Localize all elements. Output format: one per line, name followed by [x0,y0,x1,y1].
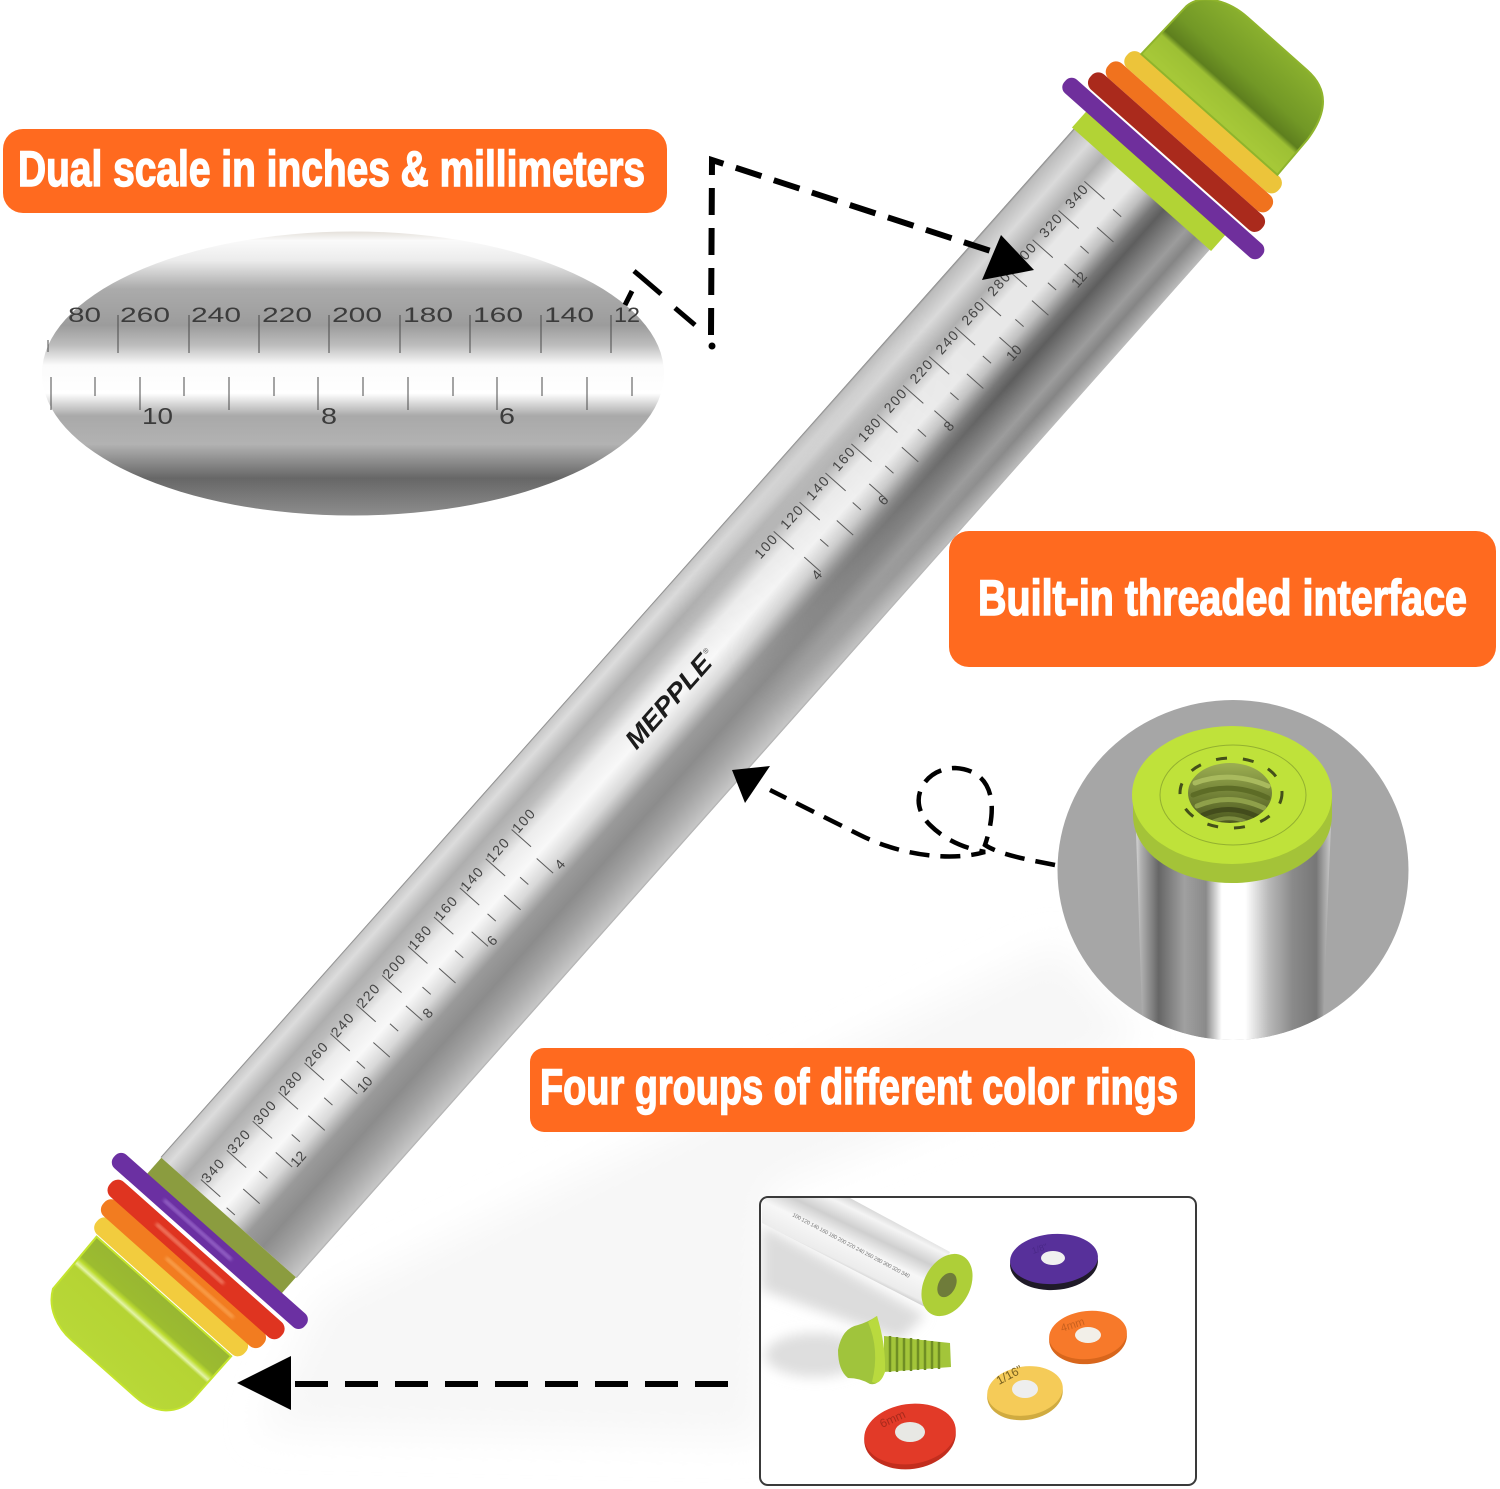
top colour rings [1059,28,1309,263]
ruler magnifier ellipse: 240 [191,304,241,327]
ruler magnifier ellipse: 140 [544,304,594,327]
arrow: photo to pin end [237,1356,728,1410]
steel rod [161,128,1210,1278]
bottom ruler scale: 200 [379,951,409,982]
bottom ruler scale: 180 [405,921,435,953]
brand logo: ® [701,646,711,656]
bottom ruler scale: 240 [327,1009,358,1040]
ruler magnifier ellipse: 12 [614,304,640,327]
rod end with thread hole [921,1254,973,1316]
top collar [1072,110,1227,251]
ruler magnifier ellipse: 80 [68,304,101,327]
top ruler scale: 260 [958,297,988,328]
top ruler scale: 120 [777,501,807,532]
top ruler scale: 320 [1036,210,1066,241]
top ruler scale: 200 [880,385,911,416]
parts photo panel [760,1197,1196,1485]
top ruler scale: 160 [829,443,859,474]
top ruler scale: 220 [906,355,937,387]
purple ring: 1/8" [1031,1242,1049,1256]
bottom ruler scale: 340 [198,1155,228,1186]
dashed hole markings [1180,758,1282,828]
bottom handle [34,1237,231,1426]
ruler magnifier ellipse: 220 [262,304,312,327]
top ruler scale: 100 [751,530,781,562]
threaded hole [1188,763,1272,823]
darker steel shading toward top end [734,129,1210,652]
bottom ruler scale: 320 [224,1125,254,1157]
red ring: 6mm [878,1407,908,1431]
top ruler scale [751,179,1136,599]
bottom ruler scale: 140 [457,863,487,894]
bottom ruler scale: 10 [353,1073,376,1095]
callout: colour rings [530,1048,1195,1132]
threaded end magnifier circle [1058,700,1408,1046]
red ring [864,1404,956,1470]
bottom colour rings [68,1150,311,1378]
bottom ruler scale: 8 [419,1005,436,1021]
brand logo: MEPPLE [619,647,719,755]
top ruler scale: 240 [932,326,962,357]
callout: dual scale: Dual scale in inches & millimeters [18,141,645,197]
callout: colour rings: Four groups of different color rings [540,1059,1178,1115]
metal cylinder [1136,826,1331,1040]
top ruler scale: 300 [1010,239,1040,270]
top ruler scale: 12 [1068,268,1090,291]
bottom ruler scale: 260 [302,1038,332,1069]
ruler magnifier ellipse: 200 [332,304,382,327]
green end face [1132,726,1332,864]
top ruler scale: 4 [808,566,825,583]
top ruler scale: 10 [1003,341,1025,364]
ruler magnifier ellipse: 160 [473,304,523,327]
top handle [1141,0,1342,175]
ruler magnifier ellipse: 10 [142,403,173,429]
floor shadows [762,1225,925,1340]
top ruler scale: 140 [803,472,833,503]
arrow: threaded interface to rod [732,766,1055,865]
top ruler scale: 8 [940,418,957,434]
yellow ring [987,1365,1063,1420]
bottom collar [147,1158,296,1294]
small rod [762,1198,950,1308]
orange ring: 4mm [1059,1316,1086,1335]
ruler magnifier ellipse: 180 [403,304,453,327]
bottom ruler scale: 12 [287,1148,309,1170]
top ruler scale: 180 [854,414,885,445]
callout: dual scale [3,129,667,213]
bottom ruler scale: 4 [551,856,568,872]
ruler magnifier ellipse [42,232,664,516]
bottom ruler scale: 120 [483,834,513,865]
ruler magnifier ellipse: 8 [321,403,337,429]
ruler magnifier ellipse: 260 [120,304,170,327]
green end side [1133,795,1332,883]
bottom ruler scale: 100 [509,805,539,836]
bottom ruler scale: 280 [276,1067,306,1098]
screw [838,1316,951,1384]
bottom ruler scale: 160 [431,892,461,923]
background floor shadow [260,945,1140,1440]
orange ring [1049,1310,1127,1364]
bottom ruler scale [194,805,581,1227]
top ruler scale: 340 [1062,180,1092,212]
top ruler scale: 280 [984,268,1014,299]
bottom ruler scale: 300 [250,1096,280,1128]
yellow ring: 1/16" [994,1362,1025,1388]
arrow: ruler ellipse to rod scale [625,160,1034,350]
top ruler scale: 6 [874,492,892,508]
small rod: 100 120 140 160 180 200 220 240 260 280 300 320 340 [791,1212,910,1280]
bottom ruler scale: 220 [353,980,384,1011]
callout: threaded interface [949,531,1496,667]
ruler magnifier ellipse: 6 [499,403,515,429]
purple ring [1010,1234,1098,1290]
bottom ruler scale: 6 [483,932,501,949]
